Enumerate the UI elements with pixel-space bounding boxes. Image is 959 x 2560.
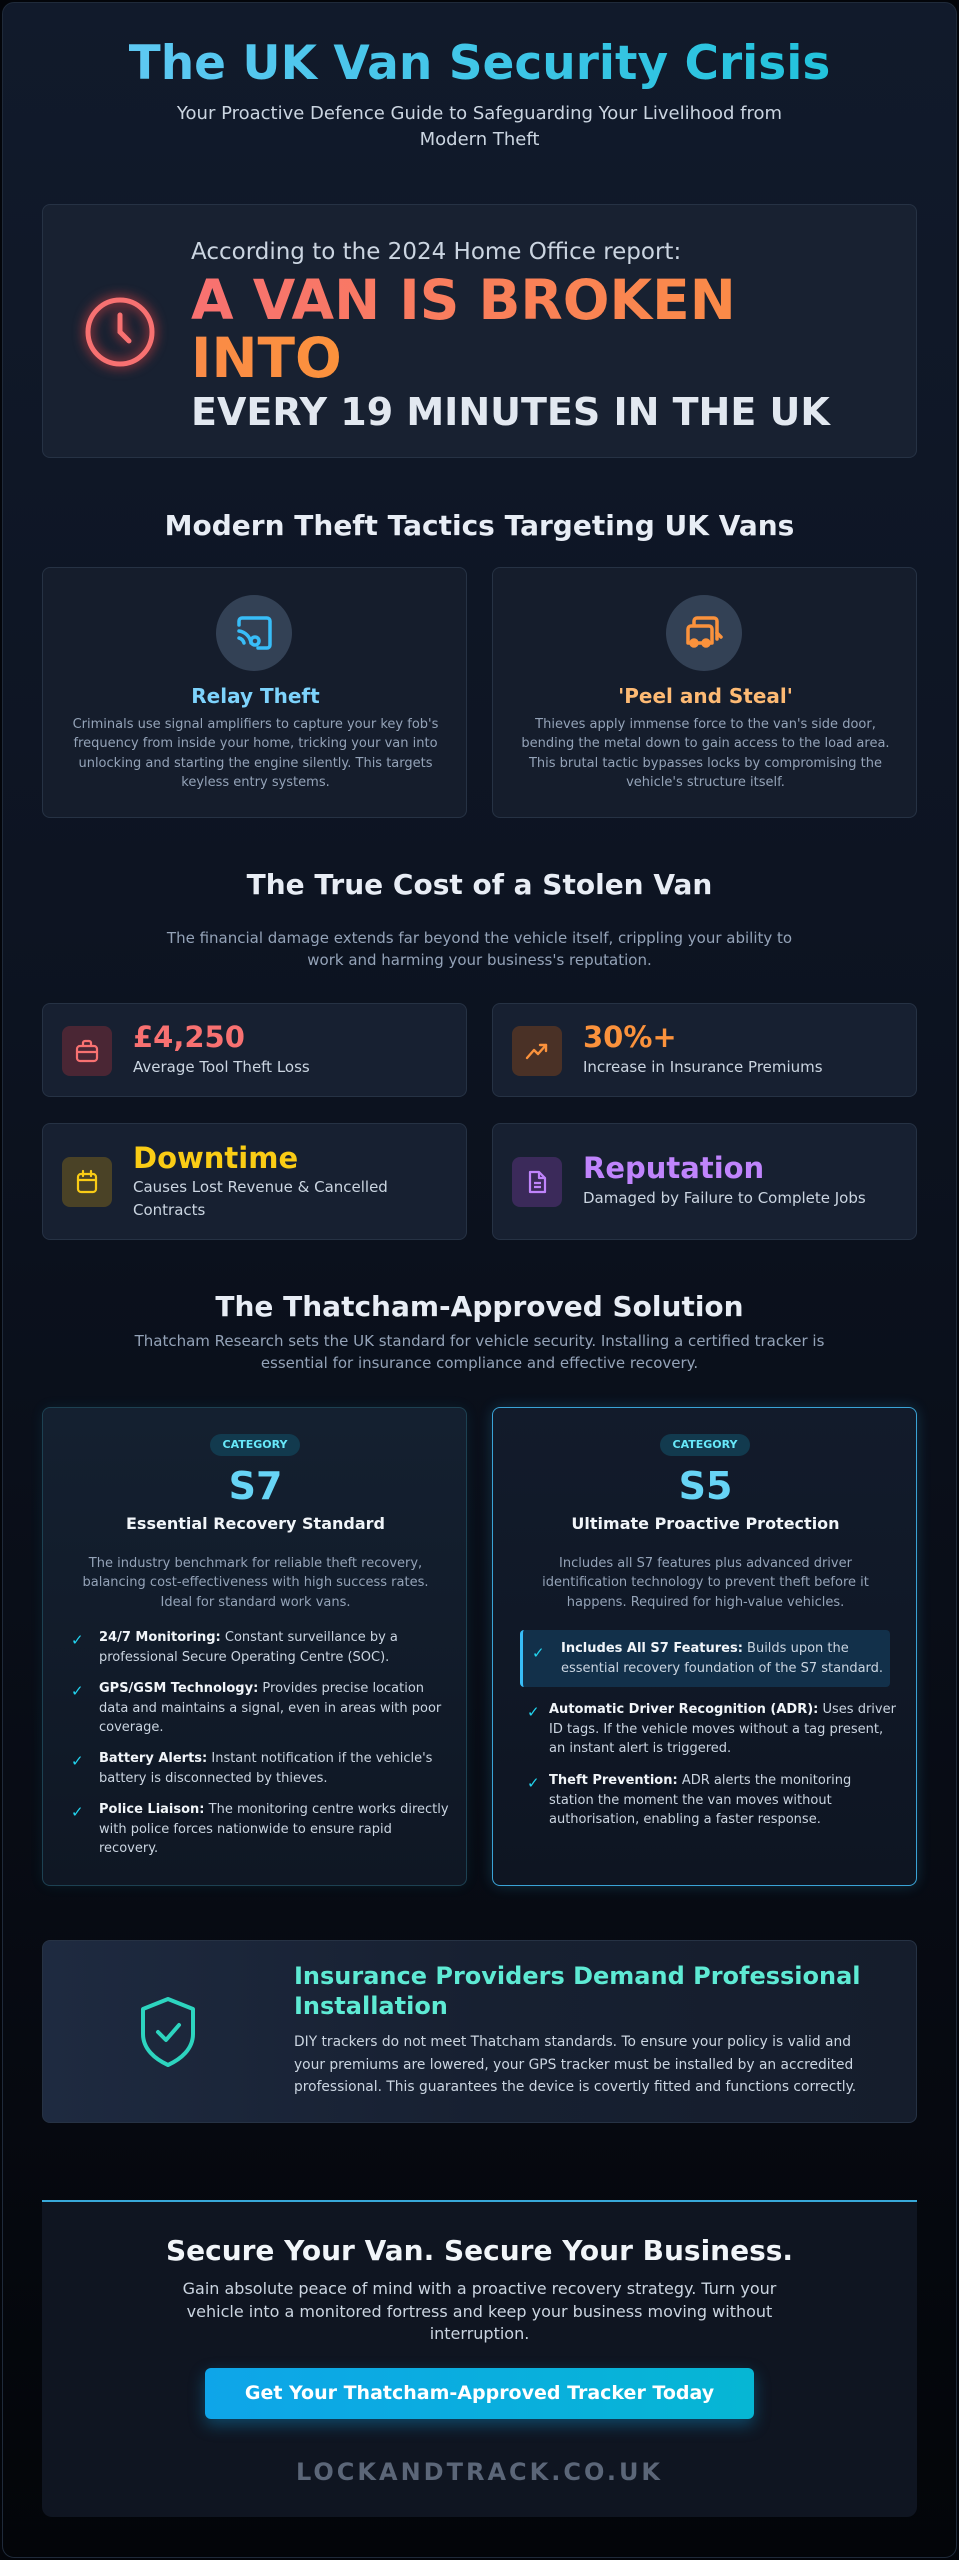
stat card: tool loss: £4,250	[133, 1020, 245, 1054]
panel: peel and steal: 'Peel and Steal'	[618, 684, 793, 708]
icon: document	[512, 1157, 562, 1207]
features list: ✓	[71, 1682, 84, 1700]
panel: S7: Essential Recovery Standard	[126, 1514, 385, 1533]
panel: peel and steal: Thieves apply immense force to the van's side door, bending the metal down to gain access to the load area. This brutal tactic bypasses locks by compromising the vehicle's structure itself.	[521, 717, 890, 790]
panel: relay theft	[42, 567, 467, 818]
panel: S5: CATEGORY	[673, 1438, 737, 1451]
panel: S5	[492, 1407, 917, 1886]
icon: clock	[76, 288, 164, 376]
features list	[71, 1630, 449, 1856]
stat text: EVERY 19 MINUTES IN THE UK	[191, 390, 830, 434]
panel: insurance callout: Insurance Providers Demand Professional Installation	[294, 1962, 861, 2020]
heading: tactics: Modern Theft Tactics Targeting UK Vans	[165, 509, 794, 542]
features list: ✓	[71, 1803, 84, 1821]
features list: Automatic Driver Recognition (ADR): Uses driver ID tags. If the vehicle moves without a tag present, an instant alert is triggered.	[549, 1702, 896, 1756]
panel: insurance callout: DIY trackers do not meet Thatcham standards. To ensure your policy is valid and your premiums are lowered, your GPS tracker must be installed by an accredited professional. This guarantees the device is covertly fitted and functions correctly.	[294, 2034, 856, 2095]
stat text: INTO	[191, 326, 342, 390]
stat text: According to the 2024 Home Office report:	[191, 239, 681, 265]
stat card: premiums: Increase in Insurance Premiums	[583, 1058, 823, 1076]
cost intro text: The financial damage extends far beyond the vehicle itself, crippling your ability to work and harming your business's reputation.	[167, 929, 792, 969]
panel: call to action: Gain absolute peace of mind with a proactive recovery strategy. Turn your vehicle into a monitored fortress and keep your business moving without interruption.	[183, 2279, 776, 2343]
features list: ✓	[527, 1703, 540, 1721]
panel: insurance callout	[42, 1940, 917, 2123]
features list	[527, 1702, 896, 1827]
features list: ✓	[527, 1774, 540, 1792]
hero stat card	[42, 204, 917, 458]
stat card: reputation	[492, 1123, 917, 1240]
icon: van	[666, 595, 742, 671]
heading: solution: The Thatcham-Approved Solution	[215, 1290, 744, 1323]
features list: GPS/GSM Technology: Provides precise location data and maintains a signal, even in areas with poor coverage.	[99, 1681, 441, 1735]
stat card: downtime: Downtime	[133, 1141, 298, 1175]
panel: S5: Includes all S7 features plus advanced driver identification technology to prevent theft before it happens. Required for high-value vehicles.	[542, 1556, 869, 1610]
panel: relay theft: Criminals use signal amplifiers to capture your key fob's frequency from inside your home, tricking your van into unlocking and starting the engine silently. This targets keyless entry systems.	[73, 717, 438, 790]
stat card: premiums	[492, 1003, 917, 1097]
button: Get Your Thatcham-Approved Tracker Today	[245, 2382, 714, 2404]
panel: S7: CATEGORY	[223, 1438, 287, 1451]
highlighted feature	[520, 1630, 890, 1687]
stat card: premiums: 30%+	[583, 1020, 677, 1054]
website: LOCKANDTRACK.CO.UK	[296, 2458, 663, 2486]
stat text: A VAN IS BROKEN	[191, 268, 736, 332]
highlighted feature: ✓	[532, 1644, 545, 1662]
panel: call to action	[42, 2200, 917, 2517]
panel: peel and steal	[492, 567, 917, 818]
subtitle: Your Proactive Defence Guide to Safeguarding Your Livelihood from Modern Theft	[177, 103, 782, 150]
panel: call to action: Secure Your Van. Secure Your Business.	[166, 2234, 793, 2267]
stat card: reputation: Reputation	[583, 1151, 764, 1185]
panel: S7: The industry benchmark for reliable theft recovery, balancing cost-effectiveness with high success rates. Ideal for standard work vans.	[82, 1556, 428, 1610]
stat card: downtime: Causes Lost Revenue & Cancelled Contracts	[133, 1178, 388, 1219]
button	[205, 2368, 754, 2419]
features list: Theft Prevention: ADR alerts the monitoring station the moment the van moves without authorisation, enabling a faster response.	[549, 1773, 851, 1827]
title: The UK Van Security Crisis	[129, 36, 830, 91]
icon: briefcase	[62, 1026, 112, 1076]
panel: S7: S7	[229, 1464, 282, 1508]
icon: shield	[141, 1997, 195, 2067]
stat card: downtime	[42, 1123, 467, 1240]
panel: S5: Ultimate Proactive Protection	[571, 1514, 840, 1533]
icon: calendar	[62, 1157, 112, 1207]
heading: true cost: The True Cost of a Stolen Van	[247, 868, 712, 901]
features list: ✓	[71, 1752, 84, 1770]
solution intro: Thatcham Research sets the UK standard for vehicle security. Installing a certified tracker is essential for insurance compliance and effective recovery.	[135, 1332, 824, 1372]
features list: Police Liaison: The monitoring centre works directly with police forces nationwide to ensure rapid recovery.	[99, 1802, 449, 1856]
stat card: reputation: Damaged by Failure to Complete Jobs	[583, 1189, 866, 1207]
features list: Battery Alerts: Instant notification if the vehicle's battery is disconnected by thieves.	[99, 1751, 432, 1786]
icon: trend up	[512, 1026, 562, 1076]
icon: relay	[216, 595, 292, 671]
highlighted feature: Includes All S7 Features: Builds upon the essential recovery foundation of the S7 standard.	[561, 1641, 883, 1676]
panel: relay theft: Relay Theft	[191, 684, 320, 708]
features list: ✓	[71, 1631, 84, 1649]
stat card: tool loss	[42, 1003, 467, 1097]
stat text	[191, 239, 831, 434]
stat card: tool loss: Average Tool Theft Loss	[133, 1058, 310, 1076]
panel: S7	[42, 1407, 467, 1886]
panel: S5: S5	[679, 1464, 732, 1508]
features list: 24/7 Monitoring: Constant surveillance by a professional Secure Operating Centre (SOC).	[99, 1630, 398, 1664]
